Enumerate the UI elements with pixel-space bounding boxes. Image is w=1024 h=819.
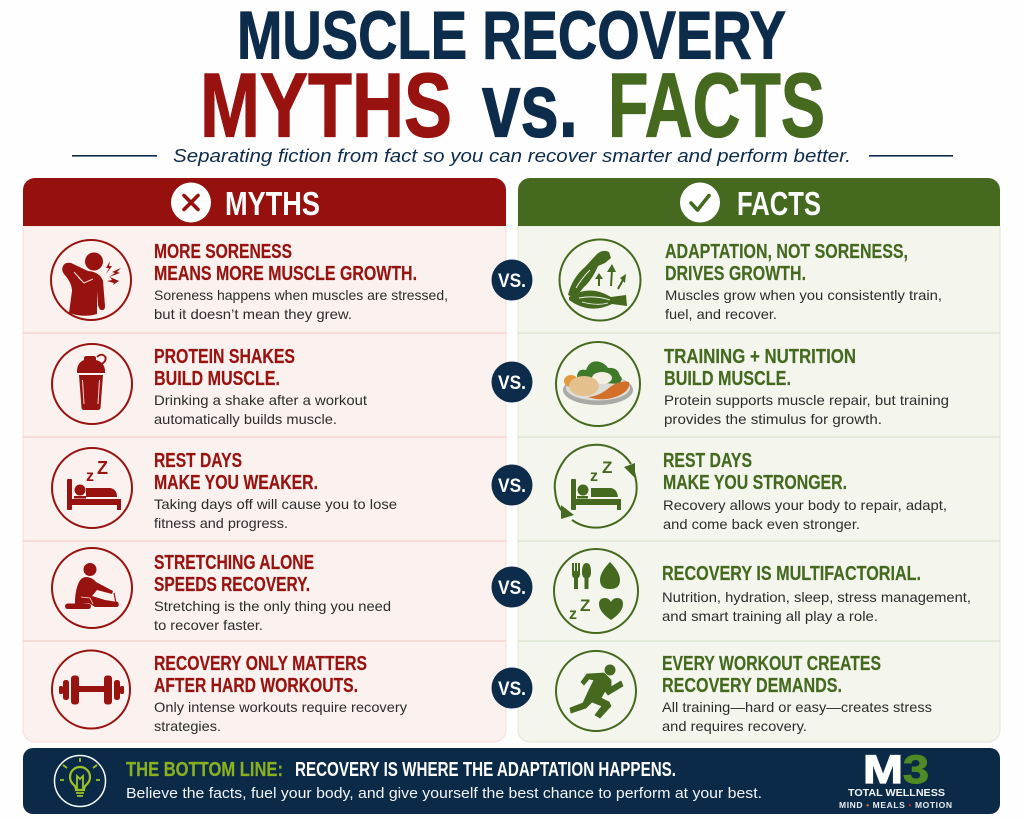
facts header: FACTS bbox=[737, 185, 821, 222]
title: myths vs. facts: vs. bbox=[482, 56, 578, 156]
icon: sleeping in bed: z bbox=[86, 468, 94, 485]
fact 3: rest days bbox=[555, 445, 947, 532]
bottom line statement: RECOVERY IS WHERE THE ADAPTATION HAPPENS. bbox=[295, 759, 676, 781]
vs badges: VS. bbox=[498, 373, 526, 394]
body text: Taking days off will cause you to lose bbox=[154, 496, 397, 512]
body text: Stretching is the only thing you need bbox=[154, 598, 391, 614]
body text: but it doesn’t mean they grew. bbox=[154, 306, 352, 322]
panel: facts bbox=[518, 178, 1000, 742]
icon: flexed muscle with arrows bbox=[560, 240, 640, 320]
heading: BUILD MUSCLE. bbox=[664, 368, 791, 390]
icon: sore shoulder bbox=[51, 240, 131, 320]
vs badges: VS. bbox=[498, 679, 526, 700]
heading: MAKE YOU WEAKER. bbox=[154, 472, 318, 494]
myth 5: hard workouts bbox=[52, 650, 407, 734]
bottom line body: Believe the facts, fuel your body, and give yourself the best chance to perform at your best. bbox=[126, 786, 762, 802]
icon: sleeping in bed bbox=[52, 448, 132, 528]
body text: Muscles grow when you consistently train, bbox=[665, 287, 942, 303]
title: myths vs. facts: MYTHS bbox=[200, 56, 452, 156]
icon: sleep with cycle arrows bbox=[555, 445, 637, 528]
fact 5: every workout bbox=[556, 651, 932, 734]
heading: BUILD MUSCLE. bbox=[154, 368, 280, 390]
icon: dumbbell bbox=[52, 650, 130, 728]
body text: and smart training all play a role. bbox=[662, 608, 878, 624]
myth 3: rest days bbox=[52, 448, 397, 531]
title: myths vs. facts: FACTS bbox=[608, 56, 825, 156]
heading: REST DAYS bbox=[663, 450, 752, 472]
heading: DRIVES GROWTH. bbox=[665, 263, 806, 285]
icon: fork, drop, sleep, heart bbox=[554, 549, 638, 633]
body text: Protein supports muscle repair, but training bbox=[664, 392, 949, 408]
body text: to recover faster. bbox=[154, 617, 263, 633]
logo: M3 total wellness: 3 bbox=[903, 748, 929, 792]
vs badges: VS. bbox=[498, 476, 526, 497]
body text: All training—hard or easy—creates stress bbox=[662, 699, 932, 715]
body text: Only intense workouts require recovery bbox=[154, 699, 407, 715]
icon: shaker bottle bbox=[52, 344, 132, 424]
body text: and requires recovery. bbox=[662, 718, 807, 734]
subtitle: Separating fiction from fact so you can recover smarter and perform better. bbox=[173, 146, 851, 166]
logo: M3 total wellness: TOTAL WELLNESS bbox=[848, 788, 945, 799]
body text: Soreness happens when muscles are stressed, bbox=[154, 287, 448, 303]
logo: M3 total wellness: MIND • MEALS • MOTION bbox=[839, 800, 952, 810]
title: myths vs. facts bbox=[200, 56, 825, 156]
vs badges: VS. bbox=[498, 578, 526, 599]
heading: STRETCHING ALONE bbox=[154, 552, 314, 574]
body text: and come back even stronger. bbox=[663, 516, 860, 532]
heading: EVERY WORKOUT CREATES bbox=[662, 653, 881, 675]
vs badges: VS. bbox=[498, 271, 526, 292]
heading: ADAPTATION, NOT SORENESS, bbox=[665, 241, 908, 263]
icon: plate of food bbox=[556, 342, 640, 426]
icon: fork, drop, sleep, heart: z bbox=[569, 606, 577, 623]
body text: provides the stimulus for growth. bbox=[664, 411, 882, 427]
facts header bbox=[518, 178, 1000, 226]
body text: automatically builds muscle. bbox=[154, 411, 337, 427]
body text: Drinking a shake after a workout bbox=[154, 392, 367, 408]
myth 2: protein shakes bbox=[52, 344, 367, 427]
vs badges bbox=[492, 260, 532, 708]
fact 1: adaptation bbox=[560, 240, 942, 322]
heading: MEANS MORE MUSCLE GROWTH. bbox=[154, 263, 417, 285]
heading: AFTER HARD WORKOUTS. bbox=[154, 675, 358, 697]
heading: RECOVERY IS MULTIFACTORIAL. bbox=[662, 563, 921, 585]
bottom line banner bbox=[23, 748, 1000, 814]
heading: PROTEIN SHAKES bbox=[154, 346, 295, 368]
myth 1: soreness bbox=[51, 240, 448, 322]
logo: M3 total wellness bbox=[839, 748, 952, 810]
icon: sleep with cycle arrows: Z bbox=[602, 458, 612, 477]
body text: Recovery allows your body to repair, adapt, bbox=[663, 497, 947, 513]
icon: light bulb bbox=[54, 756, 106, 806]
body text: fuel, and recover. bbox=[665, 306, 777, 322]
myth 4: stretching bbox=[52, 548, 391, 633]
heading: RECOVERY ONLY MATTERS bbox=[154, 653, 367, 675]
body text: Nutrition, hydration, sleep, stress management, bbox=[662, 589, 971, 605]
icon: sleeping in bed: Z bbox=[97, 458, 108, 478]
heading: RECOVERY DEMANDS. bbox=[662, 675, 842, 697]
body text: strategies. bbox=[154, 718, 221, 734]
fact 4: multifactorial bbox=[554, 549, 971, 633]
panel: myths bbox=[23, 178, 506, 742]
heading: TRAINING + NUTRITION bbox=[664, 346, 856, 368]
icon: seated stretch bbox=[52, 548, 132, 628]
logo: M3 total wellness: M bbox=[863, 748, 903, 792]
heading: SPEEDS RECOVERY. bbox=[154, 574, 310, 596]
heading: MAKE YOU STRONGER. bbox=[663, 472, 847, 494]
icon: sleep with cycle arrows: z bbox=[590, 468, 598, 485]
icon: fork, drop, sleep, heart: Z bbox=[580, 596, 590, 615]
fact 2: training + nutrition bbox=[556, 342, 949, 427]
heading: MORE SORENESS bbox=[154, 241, 292, 263]
myths header: MYTHS bbox=[225, 185, 320, 222]
body text: fitness and progress. bbox=[154, 515, 288, 531]
icon: runner bbox=[556, 651, 636, 731]
myths header bbox=[23, 178, 506, 226]
heading: REST DAYS bbox=[154, 450, 242, 472]
bottom line heading: THE BOTTOM LINE: bbox=[126, 759, 283, 781]
